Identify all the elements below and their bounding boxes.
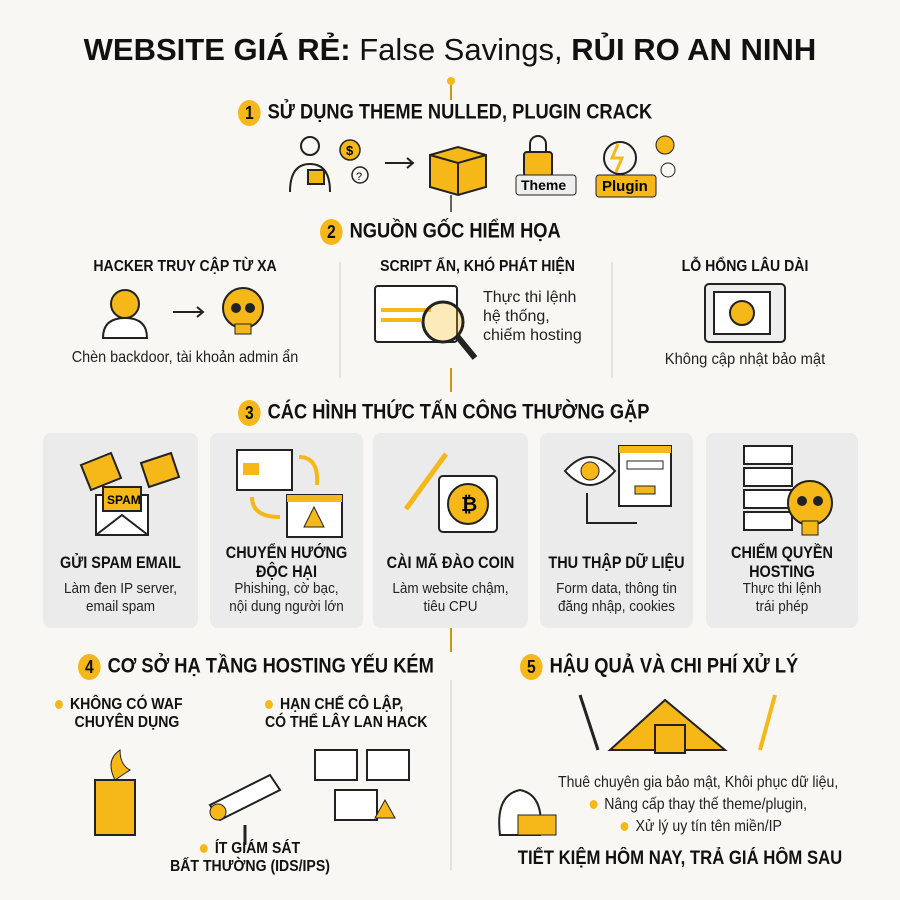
- card: redirect: ĐỘC HẠI: [256, 562, 317, 581]
- panel 4 content: KHÔNG CÓ WAF: [70, 696, 183, 713]
- card: crypto mining: CÀI MÃ ĐÀO COIN: [387, 553, 514, 572]
- heading 1: 1: [245, 103, 254, 123]
- card: redirect: Phishing, cờ bạc,: [234, 580, 339, 597]
- panel 4 content: CÓ THỂ LÂY LAN HACK: [265, 714, 427, 731]
- column: hacker: [72, 256, 298, 366]
- icons row 1: Plugin: [602, 178, 648, 195]
- heading 3: CÁC HÌNH THỨC TẤN CÔNG THƯỜNG GẶP: [268, 401, 649, 424]
- card: data collection: Form data, thông tin: [556, 580, 677, 597]
- heading 2: NGUỒN GỐC HIỂM HỌA: [350, 220, 561, 243]
- card: crypto mining: [373, 433, 528, 628]
- panel 5 content: [498, 694, 842, 869]
- card: spam: SPAM: [106, 493, 140, 507]
- card: spam: email spam: [86, 598, 155, 615]
- column: hacker: Chèn backdoor, tài khoản admin ẩn: [72, 349, 298, 366]
- column: script: Thực thi lệnh: [483, 289, 576, 306]
- panel 4 content: BẤT THƯỜNG (IDS/IPS): [170, 858, 330, 875]
- icons row 1: $: [346, 143, 354, 158]
- panel 5 content: Xử lý uy tín tên miền/IP: [636, 818, 782, 835]
- panel 4 content: HẠN CHẾ CÔ LẬP,: [280, 696, 403, 713]
- card: hosting takeover: Thực thi lệnh: [743, 580, 821, 597]
- card: hosting takeover: CHIẾM QUYỀN: [731, 543, 833, 562]
- column: script: [374, 256, 582, 360]
- column: vulnerability: [665, 256, 826, 368]
- column: script: SCRIPT ẨN, KHÓ PHÁT HIỆN: [380, 258, 575, 275]
- column: script: chiếm hosting: [483, 327, 582, 344]
- title: WEBSITE GIÁ RẺ: False Savings, RỦI RO AN NINH: [84, 32, 816, 67]
- heading 1: SỬ DỤNG THEME NULLED, PLUGIN CRACK: [268, 101, 652, 124]
- heading 3: 3: [245, 403, 254, 423]
- card: hosting takeover: HOSTING: [749, 562, 815, 581]
- panel 5 content: TIẾT KIỆM HÔM NAY, TRẢ GIÁ HÔM SAU: [518, 848, 842, 869]
- card: crypto mining: Làm website chậm,: [392, 580, 509, 597]
- column: vulnerability: Không cập nhật bảo mật: [665, 351, 825, 368]
- heading 2: 2: [327, 222, 336, 242]
- icons row 1: [289, 135, 676, 198]
- panel 4 content: [55, 694, 428, 875]
- heading 5: 5: [527, 657, 536, 677]
- panel 5 content: Thuê chuyên gia bảo mật, Khôi phục dữ liệu,: [558, 774, 838, 791]
- panel 5 content: Nâng cấp thay thế theme/plugin,: [604, 796, 807, 813]
- card: crypto mining: tiêu CPU: [423, 598, 478, 615]
- panel 4 content: ÍT GIÁM SÁT: [215, 840, 300, 857]
- icons row 1: ?: [356, 171, 362, 183]
- card: hosting takeover: trái phép: [756, 598, 808, 615]
- card: redirect: nội dung người lớn: [229, 598, 344, 615]
- column: script: hệ thống,: [483, 308, 550, 325]
- card: spam: GỬI SPAM EMAIL: [60, 553, 181, 572]
- card: spam: Làm đen IP server,: [64, 580, 177, 597]
- card: redirect: CHUYỂN HƯỚNG: [226, 543, 347, 562]
- column: vulnerability: LỖ HỔNG LÂU DÀI: [682, 258, 808, 275]
- panel 4 content: CHUYÊN DỤNG: [75, 714, 179, 731]
- heading 4: CƠ SỞ HẠ TẦNG HOSTING YẾU KÉM: [108, 655, 434, 678]
- card: data collection: [540, 433, 693, 628]
- icons row 1: Theme: [521, 177, 566, 193]
- card: data collection: đăng nhập, cookies: [558, 598, 675, 615]
- card: redirect: [210, 433, 363, 628]
- card: crypto mining: ₿: [460, 494, 477, 516]
- card: hosting takeover: [706, 433, 858, 628]
- heading 4: 4: [85, 657, 94, 677]
- column: hacker: HACKER TRUY CẬP TỪ XA: [93, 258, 277, 275]
- card: spam: [43, 433, 198, 628]
- heading 5: HẬU QUẢ VÀ CHI PHÍ XỬ LÝ: [550, 655, 798, 678]
- card: data collection: THU THẬP DỮ LIỆU: [548, 553, 685, 572]
